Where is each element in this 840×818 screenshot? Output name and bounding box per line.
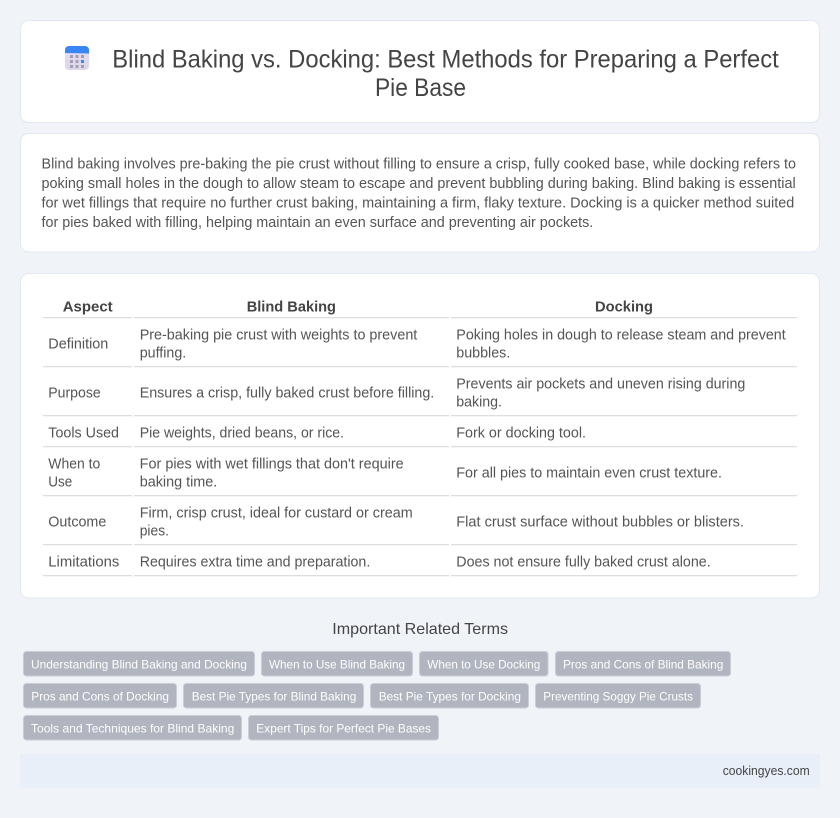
footer: cookingyes.com [723,764,810,778]
row: limitations: Limitations [48,554,119,570]
row: purpose: baking. [456,394,502,410]
panel: comparison table [20,274,820,598]
panel: introduction paragraph: poking small holes in the dough to allow steam to escape and prevent bubbling during baking. Blind baking is essential [42,176,796,192]
row: outcome: pies. [140,523,169,539]
tag [184,684,364,708]
row: when to use: For all pies to maintain even crust texture. [456,465,722,481]
row: purpose [48,376,745,410]
row: when to use: When to [48,456,100,472]
tag: Tools and Techniques for Blind Baking [31,721,234,735]
row: limitations: Does not ensure fully baked crust alone. [456,554,711,570]
tag: When to Use Blind Baking [269,657,405,671]
row: tools used [48,425,586,441]
row: limitations [48,554,711,570]
tag: Pros and Cons of Blind Baking [563,657,723,671]
tag: When to Use Docking [427,657,540,671]
footer [20,754,820,788]
title: Blind Baking vs. Docking: Best Methods for Preparing a Perfect [112,46,779,74]
row: definition: puffing. [140,345,186,361]
panel: introduction paragraph: Blind baking involves pre-baking the pie crust without filling to ensure a crisp, fully cooked base, while docking refers to [42,156,796,172]
row: when to use: baking time. [140,474,217,490]
row: outcome: Flat crust surface without bubbles or blisters. [456,514,744,530]
tag [536,684,700,708]
tag [262,652,412,676]
table header row: Aspect [63,299,113,316]
row: tools used: Tools Used [48,425,119,441]
row: definition: Poking holes in dough to release steam and prevent [456,327,786,343]
tag: Understanding Blind Baking and Docking [31,657,247,671]
tag: Pros and Cons of Docking [31,689,169,703]
tag [24,652,254,676]
panel: introduction paragraph [20,134,820,252]
row: when to use [48,456,722,490]
panel: title header [20,20,820,122]
row: tools used: Pie weights, dried beans, or rice. [140,425,344,441]
tag [556,652,730,676]
panel: introduction paragraph: for pies baked with filling, helping maintain an even surface and preventing air pockets. [42,215,593,231]
row: definition: Pre-baking pie crust with weights to prevent [140,327,417,343]
table header row: Blind Baking [247,299,336,316]
heading: important related terms: Important Related Terms [332,621,508,638]
tag [24,716,242,740]
row: purpose: Prevents air pockets and uneven rising during [456,376,745,392]
panel: introduction paragraph: for wet fillings that require no further crust baking, maintaining a firm, flaky texture. Docking is a quicker method suited [42,195,794,211]
row: when to use: For pies with wet fillings that don't require [140,456,404,472]
row: outcome: Firm, crisp crust, ideal for custard or cream [140,505,413,521]
table header row: Docking [595,299,653,316]
title: Pie Base [375,74,466,102]
title [112,46,779,102]
row: definition: Definition [48,336,108,352]
tag [24,684,176,708]
row: purpose: Ensures a crisp, fully baked crust before filling. [140,385,434,401]
tag [420,652,548,676]
tag [248,716,438,740]
row: outcome: Outcome [48,514,106,530]
tag [370,684,528,708]
tag: Expert Tips for Perfect Pie Bases [256,721,431,735]
row: purpose: Purpose [48,385,101,401]
row: outcome [48,505,744,539]
row: when to use: Use [48,474,72,490]
row: definition [48,327,786,361]
tag: Best Pie Types for Docking [379,689,521,703]
icon: calendar [65,46,89,70]
table header row [63,299,653,316]
row: limitations: Requires extra time and preparation. [140,554,370,570]
related term tags [24,652,730,740]
tag: Preventing Soggy Pie Crusts [543,689,693,703]
row: definition: bubbles. [456,345,510,361]
row: tools used: Fork or docking tool. [456,425,586,441]
tag: Best Pie Types for Blind Baking [192,689,356,703]
